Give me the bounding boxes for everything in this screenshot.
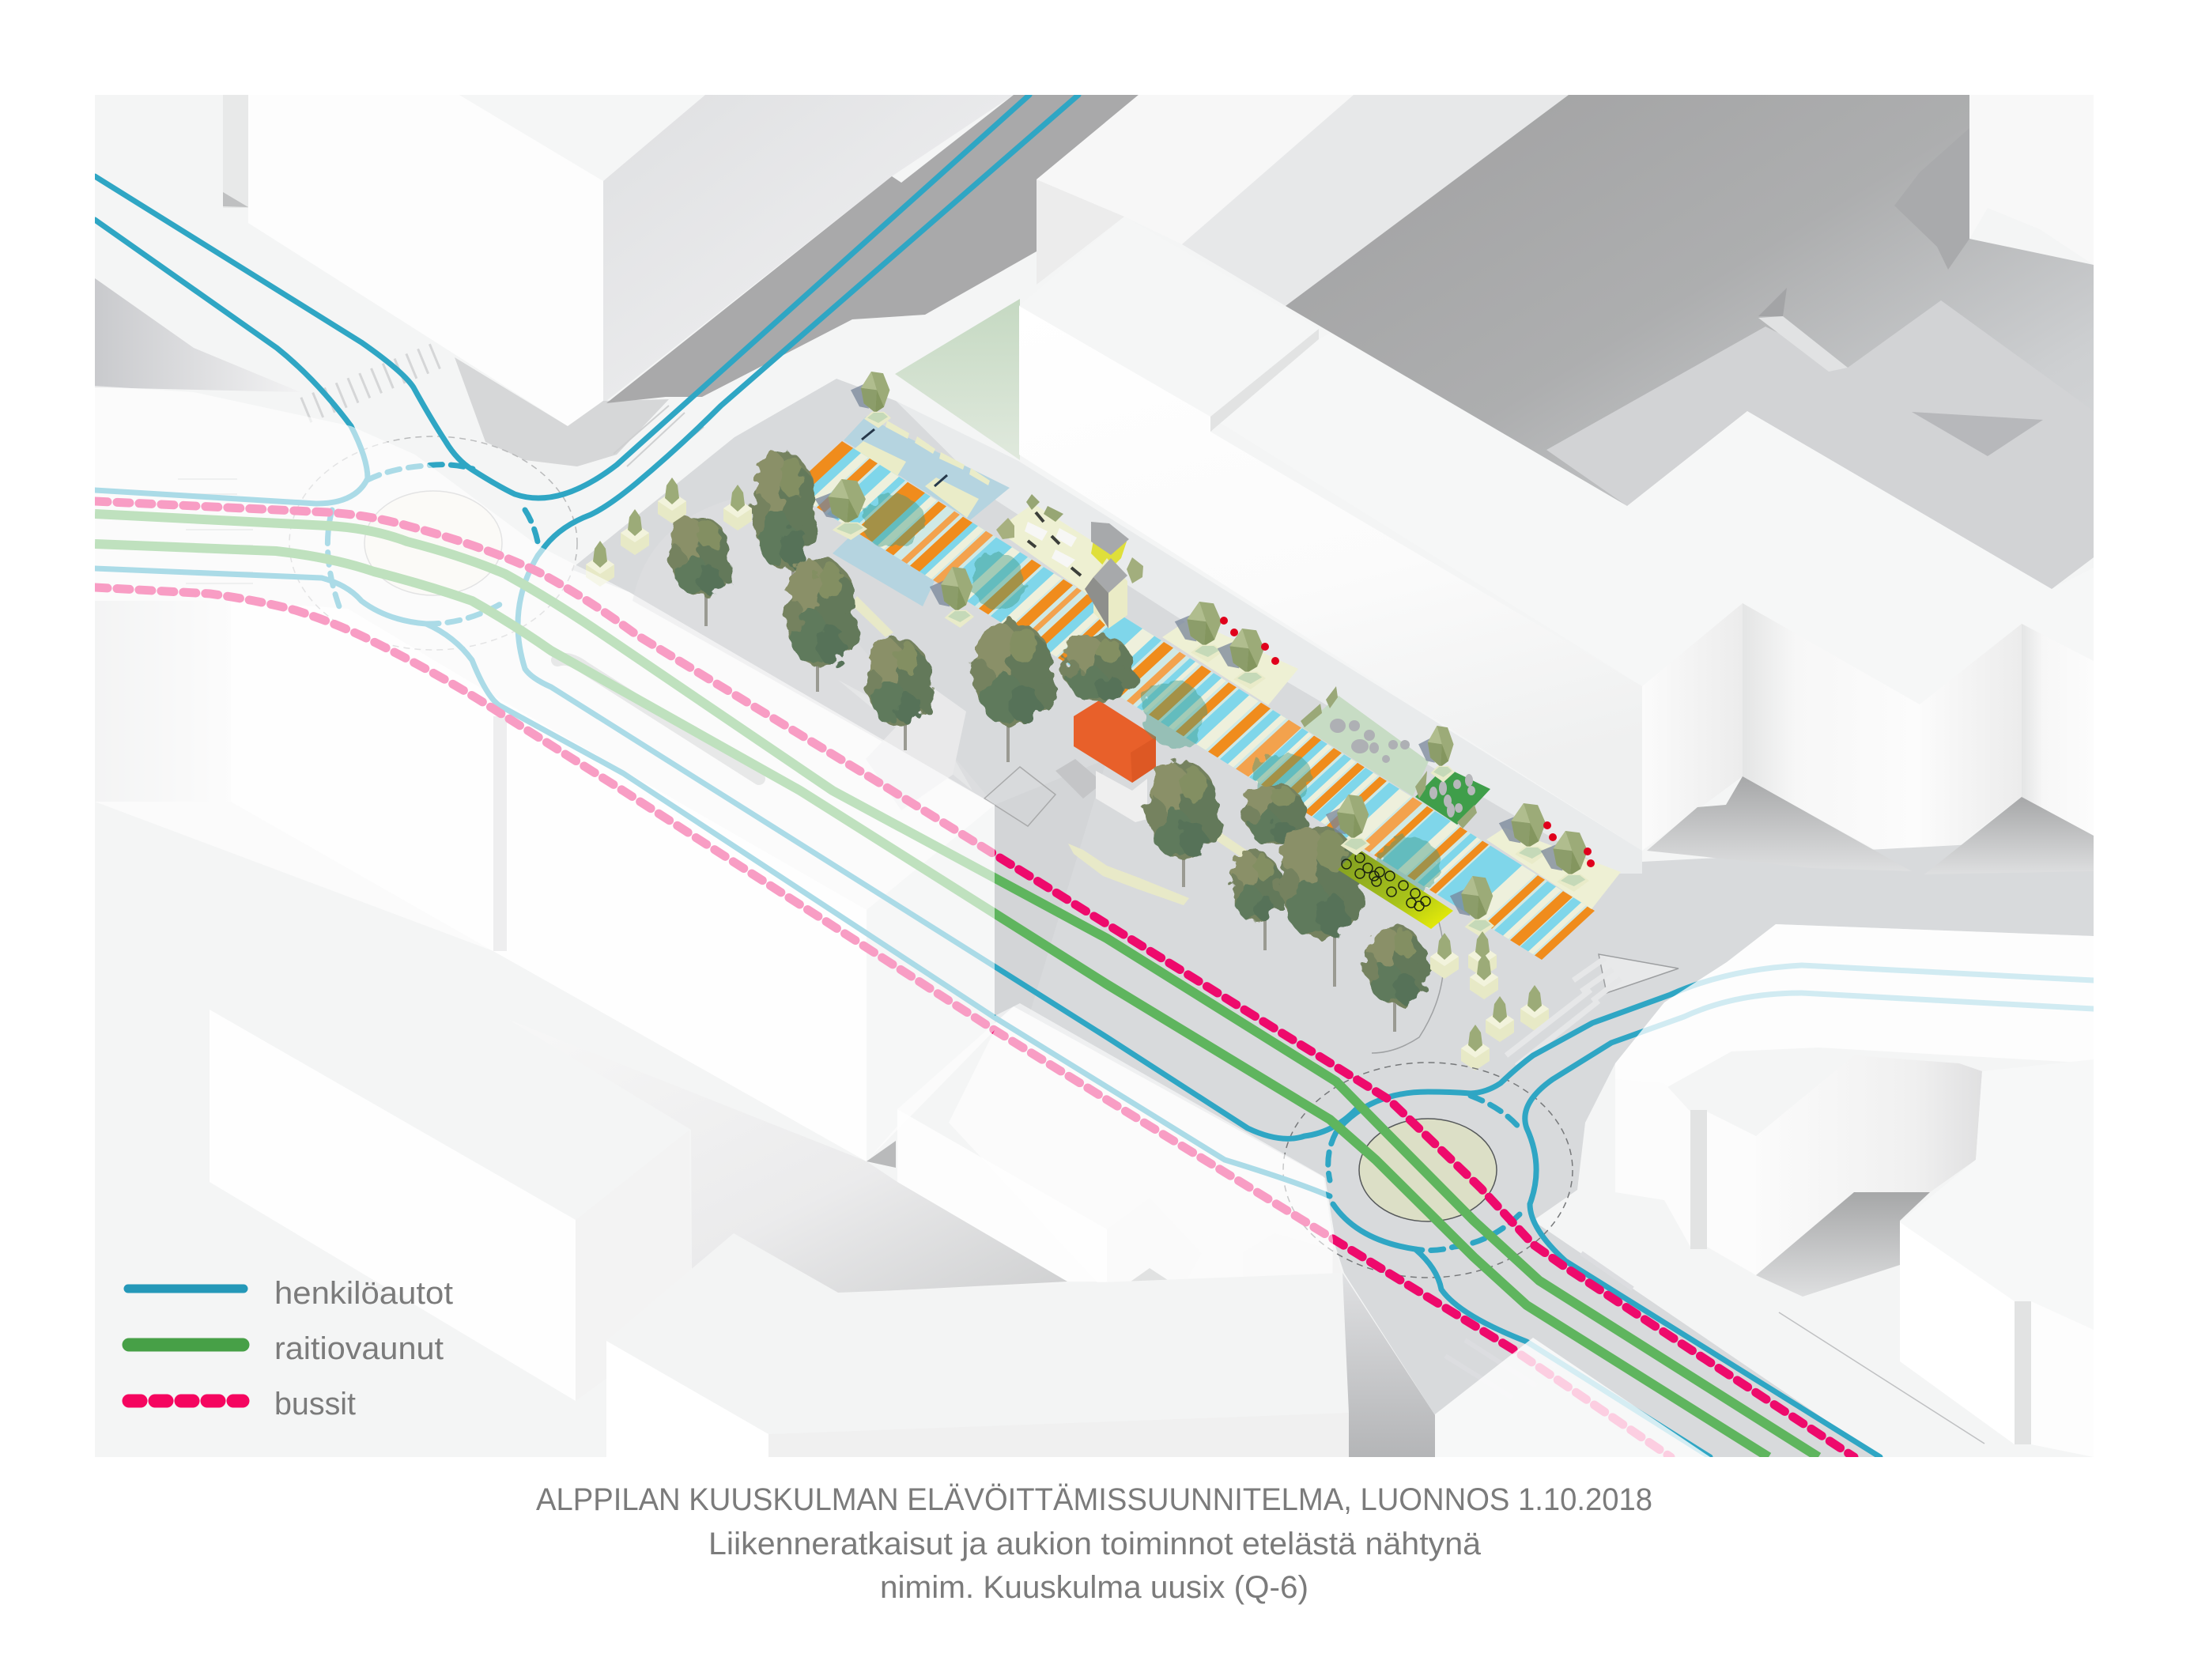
cafe panel xyxy=(996,494,1120,598)
faceted trees on planters xyxy=(815,372,1589,937)
crosswalks and lane marks xyxy=(178,356,1984,1444)
left ground shading xyxy=(95,278,274,391)
ground base xyxy=(95,95,2094,1457)
shadow gap east of south long block xyxy=(1342,1273,1435,1457)
trees xyxy=(667,450,1429,1004)
caption: title line: ALPPILAN KUUSKULMAN ELÄVÖITTÄMISSUUNNITELMA, LUONNOS 1.10.2018 xyxy=(536,1482,1652,1517)
translucent overlay: south-east corner block xyxy=(1435,1338,1710,1457)
route: trams (raitiovaunut) xyxy=(95,514,1818,1457)
building: south-east block xyxy=(1900,1059,2094,1457)
ground shadow between south blocks xyxy=(509,1020,1067,1293)
legend: cars: henkilöautot xyxy=(274,1276,453,1311)
paved circle plaza xyxy=(633,595,1444,1054)
caption: subtitle line: Liikenneratkaisut ja aukion toiminnot etelästä nähtynä xyxy=(708,1527,1482,1561)
legend: buses: bussit xyxy=(274,1387,356,1421)
red parasols xyxy=(1220,617,1595,867)
sidewalk along main slab xyxy=(896,401,1642,874)
building: east block xyxy=(1615,1055,1982,1297)
caption xyxy=(536,1482,1652,1605)
tree trunks xyxy=(706,553,1395,1032)
building: south long block xyxy=(606,1233,1349,1457)
building: long main slab xyxy=(1019,305,2051,802)
dark courtyard shadow and far blocks xyxy=(1286,95,2094,589)
plaza and street ground xyxy=(571,379,2094,1457)
cream benches on plaza xyxy=(851,596,1253,905)
grey-green stone panel xyxy=(1301,686,1429,796)
building: south-west low block xyxy=(210,913,691,1401)
caption: author line: nimim. Kuuskulma uusix (Q-6) xyxy=(880,1570,1308,1605)
tree canopy shadows on tiles xyxy=(862,495,1441,891)
dark green stone panel xyxy=(1415,767,1490,829)
translucent overlay: east block xyxy=(1615,924,2094,1123)
striped tile band xyxy=(789,441,1595,960)
pavement shadow below north-west block xyxy=(455,357,669,466)
west roundabout xyxy=(289,436,577,650)
small kiosk block and ground plates xyxy=(866,688,1103,826)
route: cars (henkilöautot) xyxy=(95,95,2094,1457)
map panel xyxy=(95,95,2094,1457)
loose planters on plaza xyxy=(586,478,1549,1070)
translucent overlay: south-west block xyxy=(95,386,995,1161)
legend xyxy=(128,1276,453,1421)
translucent overlay: south-central block xyxy=(949,1003,1333,1293)
cafe kiosks xyxy=(1085,522,1143,629)
legend: trams: raitiovaunut xyxy=(274,1331,444,1366)
orange pavilion xyxy=(1074,700,1156,822)
light-blue bike panel xyxy=(833,527,935,606)
cream terrace panel middle xyxy=(1162,619,1298,705)
building shadows under zigzag facade xyxy=(1647,776,2094,858)
east roundabout xyxy=(1283,1063,1573,1278)
shadow band across north-east street xyxy=(606,95,1139,403)
cream terrace panel south xyxy=(1486,828,1621,909)
triangle traffic island xyxy=(1599,954,1679,993)
building: south-west translucent block xyxy=(95,601,995,1168)
route: buses (bussit) xyxy=(95,501,1854,1457)
building: northern slab behind xyxy=(1037,95,1569,306)
building: north-west block xyxy=(223,95,1014,426)
light-blue seating panel top xyxy=(844,417,1010,520)
green courtyard xyxy=(895,299,1020,460)
building: south-central gabled block xyxy=(897,1006,1342,1282)
yellow bicycle parking panel xyxy=(1338,848,1453,929)
